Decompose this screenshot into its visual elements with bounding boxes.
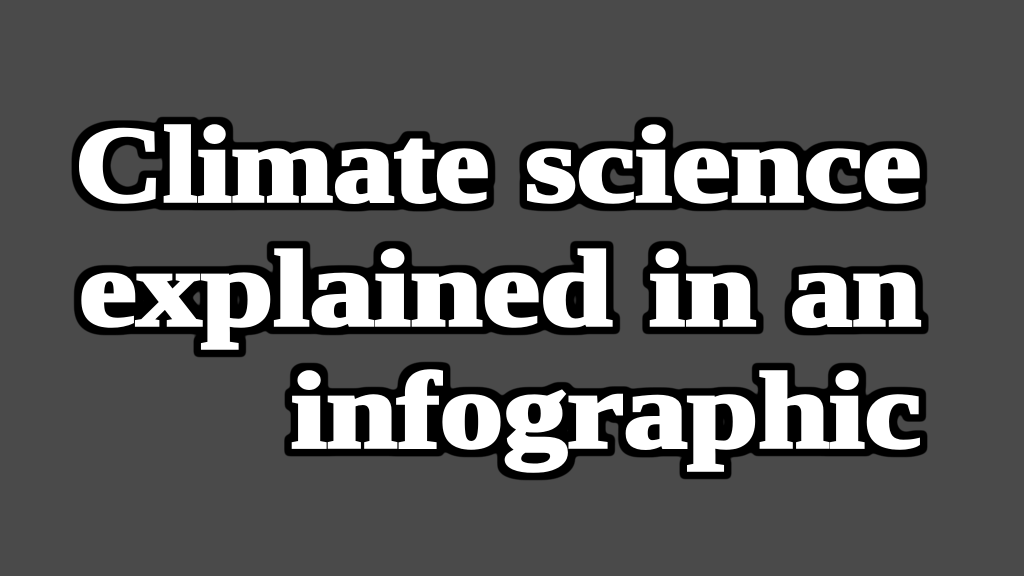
title line 1: Climate — [75, 106, 489, 225]
title line 3: infographic — [291, 352, 921, 471]
title line 1 — [75, 106, 921, 225]
title line 2: explained — [79, 230, 612, 349]
title line 2: in — [649, 230, 756, 349]
title line 2 — [79, 230, 921, 349]
title line 1: science — [525, 106, 921, 225]
title line 2: an — [790, 230, 921, 349]
